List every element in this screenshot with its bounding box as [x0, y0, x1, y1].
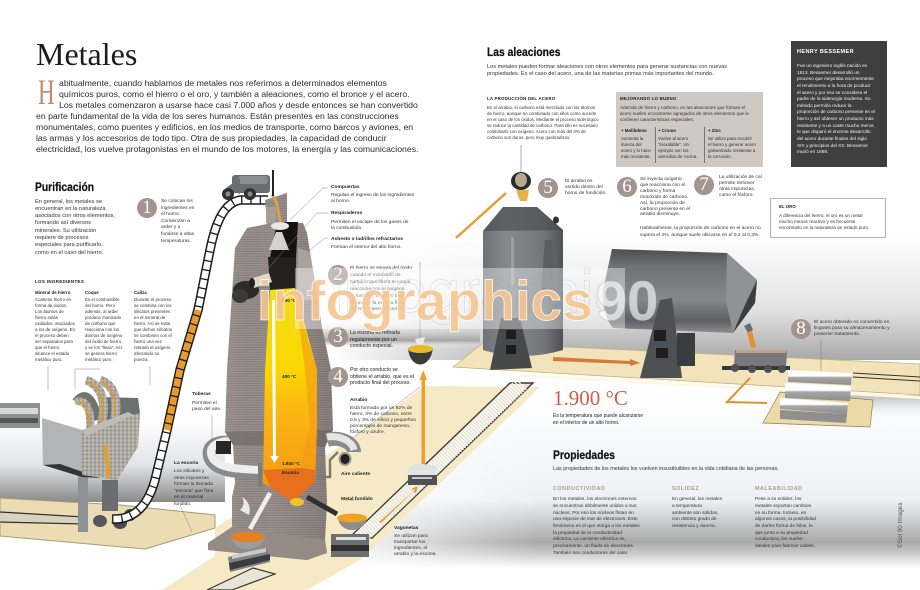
floor: central diagonal — [162, 386, 540, 590]
label: Vagonetas: arrabio y la escoria. — [394, 552, 437, 557]
Bessemer text: el acero y por eso se considera el — [797, 90, 867, 94]
text: Purificación: En general, los metales se — [35, 198, 102, 204]
heading: ingredients: LOS INGREDIENTES — [35, 279, 84, 284]
label: Asbesto — [331, 236, 403, 250]
label: Vagonetas: transportar los — [394, 540, 425, 545]
step 7 text: La utilización de cal — [719, 175, 762, 180]
step 1 text: Comienzan a — [161, 219, 190, 224]
panel: El oro — [770, 198, 886, 238]
blast furnace — [208, 170, 333, 560]
step 4 text: producto final del proceso. — [350, 380, 411, 386]
watermark: infographics — [330, 258, 654, 325]
big temperature: 1.900 °C — [553, 386, 628, 410]
ingredient: limestone — [134, 290, 172, 362]
column: conductividad — [553, 486, 640, 556]
text: Purificación: especiales para purificarlo, — [35, 242, 103, 248]
column: conductividad: se encuentran débilmente unidos a sus — [553, 504, 636, 509]
column: molibdeno — [621, 128, 651, 159]
label: Arrabio: Arrabio — [350, 398, 367, 403]
step 4 badge: 4 — [333, 366, 343, 387]
text: 1.930 °C — [282, 461, 300, 466]
ingredient: iron ore: forma de óxidos. — [35, 303, 67, 308]
step 2 text: reacciona con el oxígeno. — [350, 287, 406, 292]
label: La escoria: otras impurezas — [174, 476, 209, 480]
text: Purificación: como en el caso del hierro. — [35, 250, 103, 256]
step 8 text: El acero obtenido es convertido en — [814, 320, 889, 325]
rail: lower diagonal — [207, 568, 275, 590]
carbon note: supera el 2%, aunque suele ubicarse en el 0,2 al 0,3%. — [640, 233, 760, 238]
ingredient: iron ore: Contiene hierro en — [35, 297, 71, 302]
heading: Las aleaciones: Las aleaciones — [487, 45, 560, 59]
panel: mejorando lo bueno — [616, 92, 763, 167]
label: La escoria: Los silicatos y — [174, 469, 204, 474]
column: cromo: "inoxidable". Un — [658, 142, 689, 147]
ingot casting cart — [722, 350, 790, 373]
column: maleabilidad: ideales para fabricar cables. — [755, 544, 815, 549]
step 2 text: sobre el material fundido. — [350, 307, 405, 312]
intro paragraph: monumentales, como puentes y edificios, en los medios de transporte, como barcos y aviones, en — [36, 122, 413, 132]
column: solidez: En general, los metales — [672, 497, 722, 502]
furnace top interior — [266, 170, 317, 300]
label: Asbesto: Forman el interior del alto horno. — [331, 244, 402, 250]
step 6 text: carbono y forma — [640, 189, 675, 194]
step 7 badge — [694, 175, 714, 195]
column: zinc: el hierro y generar acero — [708, 142, 756, 147]
label: Toberas — [192, 392, 221, 412]
step 6 badge — [617, 177, 637, 197]
column: maleabilidad: Pese a su solidez, los — [755, 497, 801, 502]
ingredient: coke: además, al arder — [85, 309, 118, 314]
Bessemer text: XIX y principios del XX. Bessemer — [797, 142, 868, 148]
column: conductividad: eléctrica. La corriente eléctrica es, — [553, 537, 626, 542]
column: molibdeno: acero y lo hace — [621, 148, 651, 153]
background shading bands — [0, 235, 920, 568]
column: cromo — [658, 128, 698, 159]
step 7 text: como el fósforo. — [719, 193, 754, 198]
copyright: ©Sol 90 Images — [897, 502, 904, 548]
El oro text — [779, 213, 869, 230]
column: cromo: + Cromo — [658, 128, 676, 133]
label: Compuertas: Compuertas — [331, 185, 360, 190]
L arrow to ingots — [727, 378, 767, 403]
ingot platform and stack — [763, 340, 873, 427]
label: Vagonetas: Se utilizan para — [394, 534, 428, 539]
ingredient: limestone: hierro una vez — [134, 339, 162, 344]
label: Arrabio: fósforo y azufre. — [350, 430, 385, 435]
ingredient: coke: Es el combustible — [85, 297, 119, 302]
rail: left hopper track — [0, 403, 84, 524]
text: Purificación: formando así diversos — [35, 220, 91, 226]
Bessemer text: Fue un ingeniero inglés nacido en — [797, 63, 867, 68]
temperature caption: en el interior de un alto horno. — [553, 420, 619, 426]
text: steel production: carbono son duros, pero muy quebradizos. — [487, 135, 570, 140]
temperature labels — [282, 298, 300, 475]
ingredient: coke: produce monóxido — [85, 315, 121, 320]
label: Arrabio: hierro, 3% de carbono, entre — [350, 412, 412, 417]
step 6 badge: 6 — [622, 176, 632, 197]
step 2 text: al fondo y la escoria flota — [350, 301, 404, 306]
column: maleabilidad: de darles forma de hilos, lo — [755, 524, 813, 529]
ingredient: iron ore: que el hierro — [35, 345, 59, 350]
label: Aire caliente: Aire caliente — [341, 472, 370, 477]
ingredient: limestone: silicatos presentes — [134, 309, 170, 314]
Bessemer text: 1813. Bessemer desarrolló un — [797, 70, 860, 75]
column: solidez — [672, 486, 722, 529]
Bessemer text: lo que disparó el enorme desarrollo — [797, 129, 870, 134]
label: Toberas: Permiten el — [192, 401, 217, 406]
step 3 text: regularmente por un — [350, 337, 397, 343]
step 3 badge: 3 — [333, 326, 343, 347]
column: zinc — [708, 128, 756, 159]
label: Respiraderos: Respiraderos — [331, 211, 362, 216]
ingredient: limestone: afectando su — [134, 351, 159, 356]
step 1 text: temperaturas. — [161, 239, 191, 244]
step 3 badge — [328, 327, 348, 347]
label: Vagonetas: ingredientes, el — [394, 546, 427, 551]
step 2 badge: 2 — [333, 264, 343, 285]
column: cromo: utensilios de cocina. — [658, 154, 698, 159]
column: molibdeno: Aumenta la — [621, 136, 643, 141]
step 7 text: permite remover — [719, 181, 755, 186]
ingredient: iron ore: hierro están — [35, 315, 58, 320]
intro paragraph: abitualmente, cuando hablamos de metales nos referimos a determinados elementos — [59, 78, 387, 88]
column: zinc: galvanizado resistente a — [708, 148, 755, 153]
arrow: between converters — [553, 357, 640, 366]
label: Respiraderos: Permiten el escape de los gases de — [331, 220, 408, 225]
step 2 badge — [328, 265, 348, 285]
Bessemer text: hierro y así obtener un producto más — [797, 116, 874, 121]
ingredient: coke: reacciona con los — [85, 327, 119, 332]
label: Compuertas: Regulan el ingreso de los ingredientes — [331, 193, 414, 198]
title: Metales — [36, 36, 137, 72]
label: Vagonetas — [394, 526, 437, 557]
carbon note: Habitualmente, la proporción de carbono en el acero no — [640, 226, 761, 231]
bucket at step 3 — [408, 262, 433, 364]
step 1 text: fundirse a altas — [161, 232, 194, 237]
watermark: infographics — [257, 269, 593, 332]
column: molibdeno: + Molibdeno — [621, 128, 647, 133]
step 5 badge: 5 — [543, 177, 553, 198]
panel text: Además de hierro y carbono, en las aleaciones que forman el — [620, 105, 745, 110]
ingredient: iron ore: ser separados para — [35, 339, 73, 344]
label: Toberas: Toberas — [192, 392, 211, 397]
column: solidez: SOLIDEZ — [672, 486, 699, 492]
ingredient: iron ore: el proceso deben — [35, 333, 69, 338]
step 1 badge — [137, 198, 157, 218]
ingredient: coke: Coque — [85, 290, 99, 295]
step 5 text: horno de fundición. — [565, 191, 607, 196]
panel heading: MEJORANDO LO BUENO — [620, 96, 677, 101]
ingredient: limestone: pureza. — [134, 357, 149, 362]
column: solidez: resistencia y dureza. — [672, 524, 716, 529]
text: steel production: de hierro, aunque no combinado con ellos como sucede — [487, 111, 596, 116]
panel text — [620, 105, 749, 122]
step 1 text: arder y a — [161, 225, 180, 230]
El oro heading: EL ORO — [779, 204, 796, 209]
column: conductividad: fenómeno es el que otorga a los metales — [553, 524, 640, 529]
arrow: up to ladle — [420, 370, 427, 464]
text: aleaciones intro — [487, 64, 727, 77]
ingredient: limestone: Caliza — [134, 290, 147, 295]
step 3 text: conducto especial. — [350, 343, 393, 349]
text: 400 °C — [282, 374, 296, 379]
step 8 badge: 8 — [796, 318, 806, 339]
step 5 text: vertido dentro del — [565, 185, 603, 190]
column: maleabilidad: metales soportan cambios — [755, 504, 811, 509]
step 7 text — [719, 174, 762, 198]
step 4 badge — [328, 367, 348, 387]
right tuyere pipe — [318, 437, 354, 477]
step 1 text: Se colocan los — [161, 199, 193, 204]
Bessemer text: murió en 1898. — [797, 149, 828, 154]
carbon note — [640, 226, 761, 238]
floor: right — [453, 343, 920, 395]
text: Purificación: asociados con otros elementos, — [35, 213, 115, 219]
step 8 badge — [791, 319, 811, 339]
label: Toberas: paso del aire. — [192, 407, 221, 412]
panel: Henry Bessemer — [791, 41, 887, 167]
step 6 text: que reacciona con el — [640, 183, 685, 188]
label: La escoria: en el material — [174, 495, 203, 500]
text: steel production: En el arrabio, el carbono está mezclado con los átomos — [487, 105, 595, 110]
step 4 text: obtiene el arrabio, que es el — [350, 374, 414, 380]
heading: Propiedades: Propiedades — [553, 448, 615, 462]
ingredient: iron ore: Los átomos de — [35, 309, 64, 314]
skip-hoist ladder rail — [112, 200, 268, 519]
intro paragraph: las armas y los accesorios de todo tipo. Otra de sus propiedades, la capacidad de conducir — [36, 133, 387, 143]
Bessemer text: proceso que mejoraba enormemente — [797, 76, 874, 81]
text: aleaciones intro: Los metales pueden formar aleaciones con otros elementos para generar sustancias con nuevas — [487, 64, 727, 70]
intro paragraph: electricidad, los vuelve protagonistas en el mundo de los motores, la energía y las comunicaciones. — [36, 144, 418, 154]
label: Compuertas — [331, 185, 414, 204]
step 7 text: otras impurezas, — [719, 187, 755, 192]
illustration: furnace, converters, rails and floors — [0, 145, 920, 590]
label: La escoria: forman la llamada — [174, 482, 213, 487]
step 6 text — [640, 176, 690, 217]
El oro text: mucho menos reactivo y es frecuente — [779, 219, 855, 224]
step 4 text — [350, 367, 414, 386]
label: Arrabio — [350, 398, 416, 435]
heading: Purificación: Purificación — [35, 180, 94, 194]
ingredient: iron ore: oxidados, asociados — [35, 321, 75, 326]
step 6 text: monóxido de carbono. — [640, 195, 688, 200]
step 2 text: Al fundirse, el hierro cae — [350, 294, 403, 299]
ingredient: iron ore — [35, 290, 75, 362]
rail: upper diagonal — [349, 383, 533, 538]
column: conductividad: En los metales, los electrones externos — [553, 497, 636, 502]
step 2 text: El hierro se separa del óxido — [350, 266, 412, 271]
step 5 text: El arrabio es — [565, 179, 592, 184]
column: cromo: Vuelve al acero — [658, 136, 688, 141]
label: La escoria: fundido. — [174, 502, 191, 506]
ingredient: iron ore: alcance el estado — [35, 351, 69, 356]
column: solidez: a temperatura — [672, 504, 702, 509]
ingredient hopper — [42, 380, 140, 532]
El oro text: encontrarlo en la naturaleza en estado puro. — [779, 225, 869, 230]
column: zinc: la corrosión. — [708, 154, 732, 159]
label: La escoria — [174, 460, 214, 506]
ingredient: coke: del óxido de hierro — [85, 339, 121, 344]
label: Vagonetas: Vagonetas — [394, 526, 418, 531]
temperature caption: Es la temperatura que puede alcanzarse — [553, 413, 643, 419]
column: conductividad: También son conductores del calor. — [553, 551, 628, 556]
ingredient: limestone: hierro. Así se evita — [134, 321, 170, 326]
conveyor cart — [407, 463, 437, 485]
ingredient: limestone: en el mineral de — [134, 315, 165, 320]
ingredient: limestone: retirado el oxígeno, — [134, 345, 172, 350]
panel text: acero suelen encontrarse agregados de otros elementos que le — [620, 111, 749, 116]
ingredient: coke: átomos de oxígeno — [85, 333, 122, 338]
Bessemer text: el rendimiento a la hora de producir — [797, 83, 871, 88]
Bessemer text: padre de la siderurgia moderna. Su — [797, 96, 870, 101]
label: Arrabio: porcentajes de manganeso, — [350, 424, 410, 429]
column: maleabilidad: MALEABILIDAD — [755, 486, 803, 492]
step 2 text: cuando el monóxido de — [350, 273, 401, 278]
label: Respiraderos: la combustión. — [331, 226, 363, 231]
panel text: confieren características especiales: — [620, 117, 694, 122]
molten-metal ladle and cart — [331, 514, 369, 557]
text: 800 °C — [282, 298, 296, 303]
ingredient: coke: se genera hierro — [85, 351, 117, 356]
step 4 text: Por otro conducto se — [350, 367, 398, 373]
molten iron column — [263, 288, 317, 506]
column: zinc: + Zinc — [708, 128, 721, 133]
label: Arrabio: 0,5 y 3% de silicio y pequeños — [350, 418, 416, 423]
step 1 text: el horno. — [161, 212, 180, 217]
leader lines — [48, 188, 420, 532]
step 8 text: lingotes para su almacenamiento y — [814, 326, 890, 331]
column: conductividad: CONDUCTIVIDAD — [553, 486, 605, 492]
column: molibdeno: dureza del — [621, 142, 642, 147]
step 6 text: Se inyecta oxígeno — [640, 177, 682, 182]
ingredient: coke: de carbono que — [85, 321, 116, 326]
label: La escoria: "escoria" que flota — [174, 488, 213, 494]
text: aleaciones intro: propiedades. Es el caso del acero, una de las materias primas más importantes del mundo. — [487, 71, 714, 77]
ingredient: limestone: se combina con los — [134, 303, 172, 308]
Bessemer text: proporción de carbono presente en el — [797, 109, 875, 114]
step 6 text: arrabio disminuye. — [640, 212, 680, 217]
drop cap: H — [38, 72, 55, 112]
right-hand rail — [853, 373, 920, 381]
column: maleabilidad: en su forma. Incluso, en — [755, 511, 806, 516]
Bessemer text: método permitía reducir la — [797, 103, 851, 108]
text: steel production: se reduce la cantidad de carbono. Para ello es necesario — [487, 123, 598, 128]
left tuyere pipe — [209, 441, 260, 487]
text: steel production: en el caso de los óxidos. Mediante el proceso siderúrgico — [487, 117, 599, 122]
label: Respiraderos — [331, 210, 408, 231]
column: maleabilidad: que junto a su propiedad — [755, 531, 808, 536]
Bessemer text: resistente y a un coste mucho menor, — [797, 123, 875, 128]
text: Purificación: requiere de procesos — [35, 235, 88, 241]
column: solidez: con distinto grado de — [672, 517, 717, 522]
intro paragraph: en parte fundamental de la vida de los seres humanos. Están presentes en las construcciones — [36, 111, 399, 121]
text: Purificación — [35, 198, 115, 256]
arrow: along conveyor — [379, 486, 418, 523]
column: conductividad: núcleos. Por eso los núcleos flotan en — [553, 511, 634, 516]
step 2 text: carbono que libera el coque — [350, 280, 410, 285]
step 5 text — [565, 178, 607, 196]
intro paragraph: Los metales comenzaron a usarse hace casi 7.000 años y desde entonces se han convertido — [59, 100, 418, 110]
converter: horizontal — [603, 249, 757, 378]
step 3 text: La escoria es retirada — [350, 330, 400, 336]
step 6 text: carbono presente en el — [640, 207, 690, 212]
text: steel production: LA PRODUCCIÓN DEL ACERO — [487, 96, 555, 101]
metal tube — [307, 497, 337, 514]
column: conductividad: la propiedad de la conductividad — [553, 531, 622, 536]
column: zinc: Se utiliza para recubrir — [708, 136, 752, 141]
column: maleabilidad: conductora, los vuelve — [755, 537, 803, 542]
intro paragraph — [36, 78, 418, 154]
column: conductividad: una especie de mar de electrones. Este — [553, 517, 638, 522]
label: Compuertas: al horno. — [331, 199, 350, 204]
step 8 text — [814, 320, 890, 337]
text: Purificación: encuentran en la naturaleza — [35, 206, 106, 212]
slag tube — [250, 493, 270, 529]
text: Propiedades intro: Las propiedades de los metales los vuelven insustituibles en la vida cotidiana de las personas. — [553, 466, 779, 472]
temperature caption — [553, 413, 643, 426]
ingredient: coke: metálico puro. — [85, 357, 113, 362]
Bessemer heading: HENRY BESSEMER — [797, 49, 854, 55]
ingredient: limestone: que dichos silicatos — [134, 327, 172, 332]
text: Purificación: minerales. Su utilización — [35, 228, 96, 234]
intro paragraph: químicos puros, como el hierro o el oro, y también a aleaciones, como el bronce y el acero. — [59, 89, 410, 99]
text: Escoria — [282, 470, 299, 475]
step 6 text: Así, la proporción de — [640, 201, 685, 206]
skip car — [222, 175, 270, 200]
step 3 text — [350, 330, 400, 349]
step 7 badge: 7 — [699, 174, 709, 195]
ingredient: coke: del horno. Pero — [85, 303, 115, 308]
text: steel production: combinarlo con oxígeno. Acero con más del 3% de — [487, 129, 586, 134]
step 1 text — [161, 198, 194, 244]
ingredient: limestone: se combinen con el — [134, 333, 172, 338]
ingredient: iron ore: metálico puro. — [35, 357, 63, 362]
slag ladle and cart — [228, 497, 270, 572]
converter: vertical — [483, 207, 563, 370]
column: molibdeno: más resistente. — [621, 154, 651, 159]
column: conductividad: precisamente, un fluido de electrones. — [553, 544, 634, 549]
floor: left — [0, 498, 215, 549]
label: Asbesto: Asbesto o ladrillos refractarios — [331, 237, 403, 242]
ingredient: iron ore: a los de oxígeno. En — [35, 327, 75, 332]
Bessemer text: del acero durante finales del siglo — [797, 136, 867, 141]
ingredient: iron ore: Mineral de hierro — [35, 290, 70, 295]
ingredient: coke: y se los "lleva". Así — [85, 345, 122, 350]
step 8 text: posterior tratamiento. — [814, 332, 860, 337]
step 1 text: ingredientes en — [161, 206, 194, 211]
text: steel production — [487, 96, 599, 140]
step 2 text — [350, 266, 412, 312]
column: solidez: ambiente son sólidos, — [672, 511, 718, 516]
ingredient: coke — [85, 290, 122, 362]
label: Metal fundido: Metal fundido — [341, 497, 373, 502]
column: cromo: ejemplo son los — [658, 148, 689, 153]
column: maleabilidad: algunos casos, la posibilidad — [755, 517, 816, 522]
column: maleabilidad — [755, 486, 816, 549]
El oro text: A diferencia del hierro, el oro es un metal — [779, 213, 862, 218]
label: Arrabio: Está formado por un 92% de — [350, 406, 412, 411]
watermark: 90 — [596, 269, 658, 332]
step 5 badge — [538, 178, 558, 198]
label: La escoria: La escoria — [174, 461, 198, 466]
hanging ladle — [511, 145, 531, 201]
step 1 badge: 1 — [142, 197, 152, 218]
charge smoke and pipe — [232, 273, 272, 303]
Bessemer text — [797, 63, 875, 154]
ingredient: limestone: Durante el proceso — [134, 297, 171, 302]
arrow: to pouring ladle — [456, 193, 506, 238]
